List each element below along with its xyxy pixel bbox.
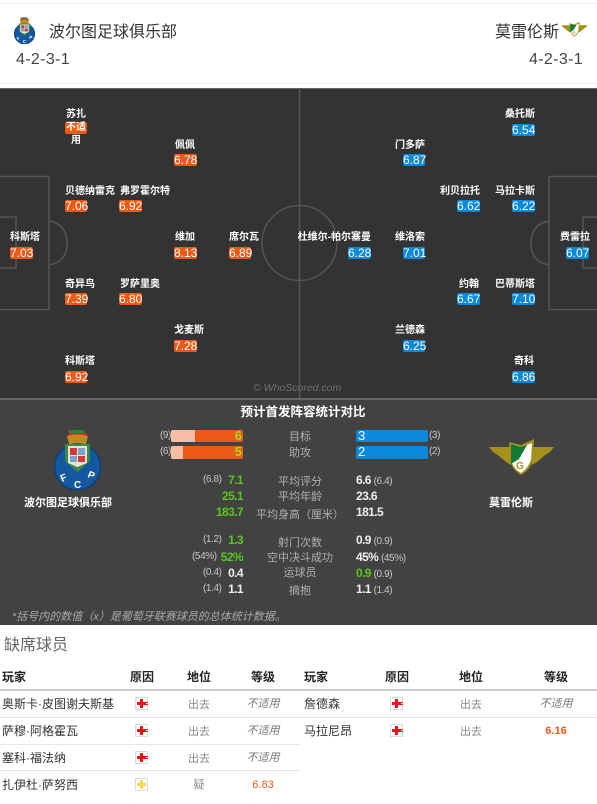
stat row: average rating: 平均评分	[278, 476, 322, 488]
row: 萨穆·阿格霍瓦: 不适用	[246, 725, 280, 737]
row: 扎伊杜·萨努西: 6.83	[252, 779, 274, 791]
player 席尔瓦: 席尔瓦	[229, 232, 259, 243]
bar chart: goals	[160, 428, 440, 443]
player 兰德森	[395, 324, 426, 353]
player 维加: 8.13	[174, 246, 197, 260]
player 马拉卡斯: 6.22	[512, 199, 535, 213]
stat row: average height: 183.7	[216, 505, 243, 519]
stat row: dribbles	[203, 566, 392, 580]
player 罗萨里奥: 罗萨里奥	[120, 279, 160, 290]
player 弗罗霍尔特	[119, 185, 170, 213]
stat row: aerial duels won	[192, 550, 406, 564]
icon: Moreirense crest large	[489, 439, 554, 475]
row: 奥斯卡·皮图谢夫斯基: 出去	[188, 699, 210, 711]
row: 马拉尼昂: 6.16	[545, 725, 567, 737]
player 费雷拉: 6.07	[566, 246, 589, 260]
player 科斯塔: 科斯塔	[65, 356, 95, 367]
player 巴蒂斯塔	[495, 278, 535, 306]
bar chart: assists: 助攻	[289, 447, 311, 459]
players: Porto lineup	[10, 108, 259, 384]
row: 詹德森: 出去	[460, 699, 482, 711]
row: 萨穆·阿格霍瓦: 萨穆·阿格霍瓦	[2, 724, 78, 738]
stat row: shots on target: 0.9 (0.9)	[356, 533, 392, 547]
player 戈麦斯: 7.28	[174, 339, 197, 353]
player 戈麦斯: 戈麦斯	[174, 325, 204, 336]
player 苏扎: 用	[71, 135, 81, 146]
player 兰德森: 兰德森	[395, 325, 425, 336]
player 戈麦斯	[174, 324, 204, 353]
player 杜维尔-帕尔塞曼	[298, 230, 371, 260]
bar chart: goals: 目标	[289, 431, 311, 443]
stat row: aerial duels won: 空中决斗成功	[267, 552, 333, 564]
table: Moreirense missing players: 地位	[459, 670, 483, 684]
stat row: average height: 181.5	[356, 505, 383, 519]
stat row: tackles: 1.1 (1.4)	[356, 582, 392, 596]
row: 扎伊杜·萨努西: 扎伊杜·萨努西	[2, 778, 78, 792]
stat row: average age	[222, 489, 378, 503]
player 科斯塔: 6.92	[65, 370, 88, 384]
player 门多萨: 门多萨	[395, 140, 425, 151]
player 维加	[174, 231, 197, 260]
icon: Moreirense crest small	[561, 22, 588, 37]
player 苏扎: 苏扎	[66, 109, 86, 120]
row: 詹德森	[300, 691, 597, 717]
bar chart: goals: (9)	[160, 430, 171, 441]
player 席尔瓦: 6.89	[229, 246, 252, 260]
row: 奥斯卡·皮图谢夫斯基: 奥斯卡·皮图谢夫斯基	[2, 697, 114, 711]
player 桑托斯: 桑托斯	[505, 109, 535, 120]
panel: pitch	[0, 88, 597, 398]
player 奇科	[512, 355, 535, 384]
player 奇异鸟: 奇异鸟	[65, 279, 95, 290]
stat row: average rating: 7.1	[228, 473, 243, 487]
home team label: 波尔图足球俱乐部	[24, 497, 112, 509]
player 兰德森: 6.25	[403, 339, 426, 353]
player 桑托斯: 6.54	[512, 123, 535, 137]
player 贝德纳雷克: 贝德纳雷克	[65, 186, 115, 197]
player 费雷拉: 费雷拉	[560, 232, 590, 243]
player 弗罗霍尔特: 弗罗霍尔特	[120, 186, 170, 197]
row: 扎伊杜·萨努西: 疑	[194, 779, 204, 791]
home team name: 波尔图足球俱乐部	[49, 24, 177, 41]
table header: 玩家	[2, 670, 26, 684]
player 奇异鸟	[65, 278, 95, 306]
row: 奥斯卡·皮图谢夫斯基: 不适用	[246, 698, 280, 710]
table: Moreirense missing players	[300, 668, 597, 744]
player 科斯塔 GK: 7.03	[10, 246, 33, 260]
stat row: tackles	[203, 582, 392, 597]
bar chart: assists: 5	[235, 444, 242, 459]
player 杜维尔-帕尔塞曼: 6.28	[348, 246, 371, 260]
player 利贝拉托: 6.62	[457, 199, 480, 213]
footnote: *括号内的数值（x）是葡萄牙联赛球员的总体统计数据。	[12, 611, 286, 623]
stat row: shots on target: 射门次数	[278, 537, 322, 549]
table: Porto missing players	[0, 670, 300, 792]
stat row: average height	[216, 505, 384, 521]
stat row: tackles: (1.4)	[203, 583, 222, 594]
bar chart: goals: 3	[358, 428, 365, 443]
player 维洛索: 7.01	[403, 246, 426, 260]
player 科斯塔 GK: 科斯塔	[10, 232, 40, 243]
player 科斯塔 GK	[10, 231, 40, 260]
bar chart: assists	[160, 444, 440, 459]
icon: Porto crest large	[54, 429, 101, 490]
row: 萨穆·阿格霍瓦	[0, 718, 300, 744]
stat row: average age: 25.1	[222, 489, 243, 503]
player 佩佩: 佩佩	[175, 140, 195, 151]
player 奇异鸟: 7.39	[65, 292, 88, 306]
player 巴蒂斯塔: 巴蒂斯塔	[495, 279, 535, 290]
row: 奥斯卡·皮图谢夫斯基	[2, 697, 280, 711]
table: Porto missing players: 地位	[187, 670, 211, 684]
bar chart: assists: 2	[358, 444, 365, 459]
section heading: missing players: 缺席球员	[4, 637, 68, 654]
table: Moreirense missing players: 原因	[385, 670, 409, 684]
row: 萨穆·阿格霍瓦: 出去	[188, 726, 210, 738]
row: 马拉尼昂: 出去	[460, 726, 482, 738]
stat row: dribbles: (0.4)	[203, 567, 222, 578]
row: 詹德森: 詹德森	[304, 697, 340, 711]
player 佩佩	[174, 139, 197, 167]
stat row: average rating	[203, 473, 392, 488]
bar chart: assists: (2)	[429, 446, 440, 457]
panel: lineup stats comparison	[0, 398, 597, 625]
stat row: aerial duels won: 45% (45%)	[356, 550, 406, 564]
player 维洛索	[395, 231, 426, 260]
player 维洛索: 维洛索	[395, 232, 425, 243]
player 席尔瓦	[229, 231, 259, 260]
row: 塞科·福法纳: 出去	[188, 753, 210, 765]
player 约翰: 约翰	[459, 279, 479, 290]
player 马拉卡斯: 马拉卡斯	[495, 186, 535, 197]
player 苏扎	[65, 108, 87, 146]
stat row: shots on target: (1.2)	[203, 534, 222, 545]
stat row: average height: 平均身高（厘米）	[256, 509, 344, 521]
bar chart: assists: (6)	[160, 446, 171, 457]
player 马拉卡斯	[495, 184, 535, 213]
icon: Porto crest small	[14, 16, 35, 44]
table: Moreirense missing players: 等级	[544, 670, 568, 684]
player 佩佩: 6.78	[174, 153, 197, 167]
stat row: tackles: 摘抱	[289, 585, 311, 597]
player 约翰: 6.67	[457, 292, 480, 306]
player 罗萨里奥	[119, 278, 160, 306]
player 门多萨: 6.87	[403, 153, 426, 167]
player 利贝拉托: 利贝拉托	[440, 186, 480, 197]
player 约翰	[457, 278, 480, 306]
stats heading: 预计首发阵容统计对比	[240, 405, 366, 419]
stat row: shots on target	[203, 533, 392, 549]
player 贝德纳雷克: 7.06	[65, 199, 88, 213]
table: Porto missing players: 原因	[130, 670, 154, 684]
player 弗罗霍尔特: 6.92	[119, 199, 142, 213]
player 门多萨	[395, 139, 426, 167]
home formation: 4-2-3-1	[16, 51, 70, 68]
player 科斯塔	[65, 355, 95, 384]
stat row: dribbles: 运球员	[284, 567, 316, 579]
header: match teams	[0, 3, 597, 84]
stat row: average age: 平均年龄	[278, 491, 322, 503]
away team name: 莫雷伦斯	[495, 24, 559, 41]
row: 塞科·福法纳: 不适用	[246, 752, 280, 764]
player 奇科: 6.86	[512, 370, 535, 384]
player 奇科: 奇科	[514, 356, 534, 367]
player 巴蒂斯塔: 7.10	[512, 292, 535, 306]
player 苏扎: 不适	[66, 122, 86, 133]
player 桑托斯	[505, 108, 535, 137]
row: 马拉尼昂: 马拉尼昂	[304, 724, 352, 738]
stat row: shots on target: 1.3	[228, 533, 243, 547]
player 杜维尔-帕尔塞曼: 杜维尔-帕尔塞曼	[298, 232, 371, 243]
stat row: average rating: 6.6 (6.4)	[356, 473, 392, 487]
row: 马拉尼昂	[300, 718, 597, 744]
players: Moreirense lineup	[298, 108, 590, 384]
stat row: aerial duels won: 52%	[221, 550, 243, 564]
player 利贝拉托	[440, 184, 480, 213]
player 罗萨里奥: 6.80	[119, 292, 142, 306]
stat row: dribbles: 0.9 (0.9)	[356, 566, 392, 580]
row: 詹德森: 不适用	[540, 698, 572, 710]
watermark: © WhoScored.com	[253, 382, 341, 394]
table header: 玩家	[304, 670, 328, 684]
row: 塞科·福法纳: 塞科·福法纳	[2, 751, 66, 765]
stat row: dribbles: 0.4	[228, 566, 243, 580]
stat row: tackles: 1.1	[228, 582, 243, 596]
stat row: average age: 23.6	[356, 489, 377, 503]
bar chart: goals: (3)	[429, 430, 440, 441]
stat row: aerial duels won: (54%)	[192, 551, 217, 562]
player 维加: 维加	[175, 232, 195, 243]
pitch markings	[0, 88, 597, 398]
row: 扎伊杜·萨努西	[0, 771, 300, 798]
row: 塞科·福法纳	[0, 745, 300, 771]
player 费雷拉	[560, 230, 590, 260]
bar chart: goals: 6	[235, 428, 242, 443]
table: Porto missing players: 等级	[251, 670, 275, 684]
away formation: 4-2-3-1	[529, 51, 583, 68]
player 贝德纳雷克	[65, 185, 115, 213]
stat row: average rating: (6.8)	[203, 474, 222, 485]
away team label: 莫雷伦斯	[489, 497, 533, 509]
